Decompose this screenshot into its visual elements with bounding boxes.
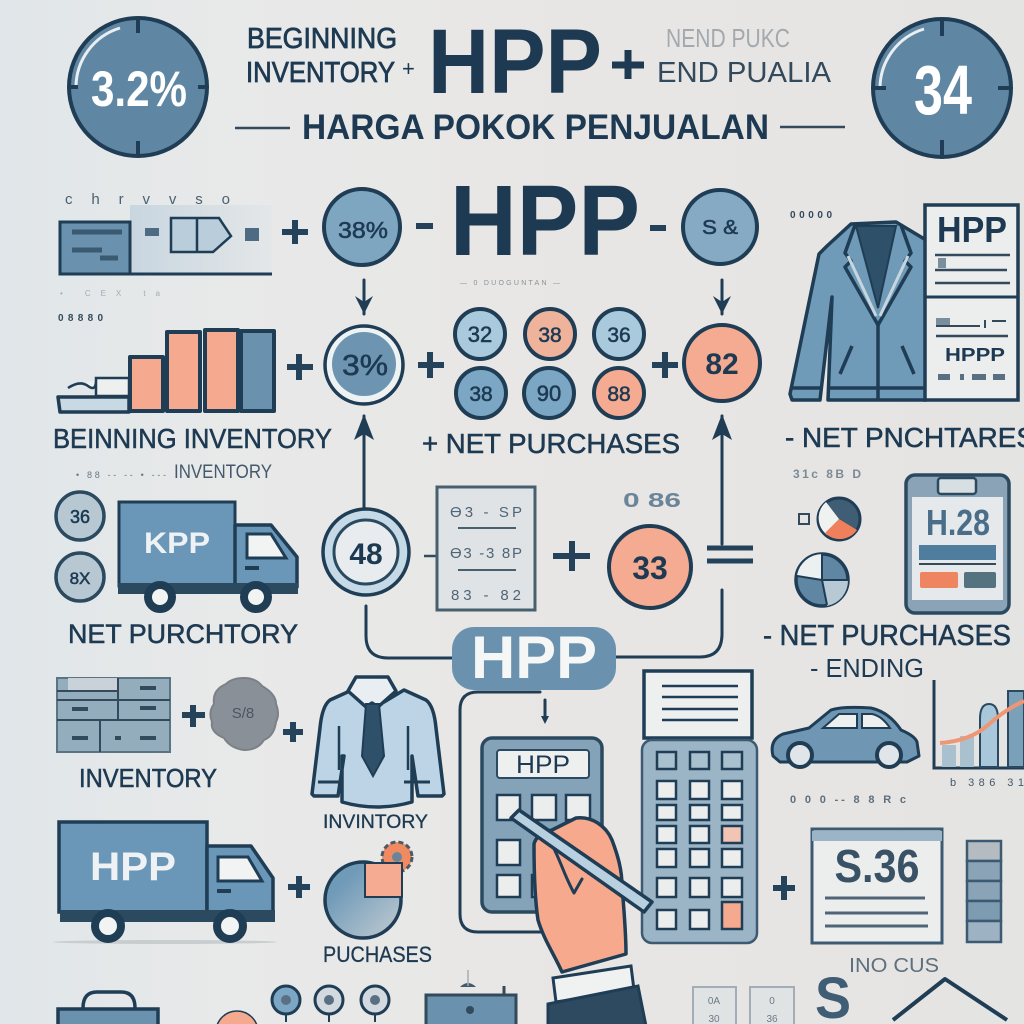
label: net purchases: + NET PURCHASES: [422, 428, 680, 459]
title block: END PUALIA: [657, 57, 832, 89]
frame around left calculator: [460, 692, 548, 932]
plus: [652, 352, 678, 378]
purchases circle icon: [325, 842, 412, 938]
badge cluster: net purchases: [455, 309, 644, 418]
calculator: left: [482, 738, 602, 912]
car icon: [772, 707, 919, 767]
badge: 3%: [325, 326, 403, 404]
bottom row: salmon circle: [216, 1011, 258, 1024]
equals: [707, 548, 753, 561]
gear blob icon: [210, 678, 278, 750]
label: inventory small: INVENTORY: [174, 462, 272, 483]
plus: [553, 541, 590, 571]
badge: S%: S &: [702, 217, 739, 239]
gauge: 34: [872, 18, 1012, 157]
badge: 33 with small caption: [609, 490, 691, 608]
gauge: 3.2%: 3.2%: [91, 61, 187, 117]
badge: 82: [684, 325, 760, 401]
table document: ϴ3 - SP: [450, 504, 522, 521]
label: invintory: INVINTORY: [323, 812, 428, 833]
badge: 3%: 3%: [342, 350, 388, 382]
badge: 48: 48: [349, 538, 383, 571]
price panel: [812, 829, 942, 943]
title block: [235, 11, 845, 147]
heading: HPP: HPP: [450, 165, 640, 277]
plus: [287, 354, 313, 380]
arrow down: [713, 280, 731, 314]
badge cluster: net purchases: 32: [468, 322, 492, 347]
truck: HPP 2: HPP: [90, 845, 176, 889]
bar chart: beginning inventory: [58, 313, 274, 412]
gauge: 3.2%: [68, 17, 208, 157]
gauge: 34: 34: [914, 51, 972, 129]
label: inventory: INVENTORY: [79, 763, 217, 793]
truck: HPP 2: [53, 822, 277, 944]
bar chart: beginning inventory: 0 8 8 8 0: [58, 313, 103, 324]
label: ino cus: INO CUS: [849, 955, 939, 977]
jacket icon: [790, 210, 926, 400]
table document: [424, 487, 535, 610]
plus: [773, 876, 795, 900]
caption: small text: — 0 DUOGUNTAN —: [460, 280, 560, 287]
line and bar chart: [934, 680, 1024, 789]
badges: 36 and 8X: 36: [70, 507, 90, 527]
tablet: H.28: [926, 502, 990, 543]
price panel: S.36: [834, 840, 920, 892]
title block: INVENTORY: [246, 57, 395, 89]
document: HPP sheet: HPPP: [945, 345, 1005, 365]
badge cluster: net purchases: 88: [607, 383, 631, 406]
badge cluster: net purchases: 36: [607, 324, 631, 347]
plus: [283, 722, 303, 742]
badge cluster: net purchases: 90: [537, 381, 561, 406]
shirt cuff and sleeve: [548, 966, 646, 1024]
calculator: right with receipt: [642, 671, 757, 943]
bottom row: briefcase: [58, 992, 158, 1024]
badge cluster: net purchases: 38: [538, 324, 562, 347]
drawers cabinet: [57, 678, 170, 752]
badge: 33 with small caption: 0 86: [623, 490, 681, 512]
badge: 48: [323, 509, 409, 595]
tiny arrow: [541, 700, 549, 724]
stacked column: [967, 841, 1001, 942]
row 1: inventory picture: [60, 191, 272, 298]
plus: [182, 705, 205, 727]
document: HPP sheet: HPP: [937, 209, 1007, 250]
label: beginning inventory: BEINNING INVENTORY: [53, 423, 332, 454]
table document: 83 - 82: [451, 587, 521, 604]
bottom row: triangle: [893, 979, 1007, 1020]
badge: 38%: 38%: [338, 217, 388, 243]
bottom row: small tables: 0A: [708, 996, 720, 1007]
truck: KPP: [118, 502, 298, 609]
connector: left to HPP pill: [366, 606, 454, 658]
badge: 33 with small caption: 33: [632, 550, 668, 586]
pie charts: [793, 467, 861, 606]
label: net purchases right: - NET PURCHASES: [763, 620, 1011, 652]
table document: ϴ3 -3 8P: [450, 545, 522, 562]
badge: 38%: [324, 189, 400, 265]
hand holding pen: [511, 810, 652, 972]
badge: 82: 82: [705, 348, 739, 381]
label: ending: - ENDING: [810, 653, 924, 683]
truck: KPP: KPP: [144, 527, 210, 560]
badges: 36 and 8X: [56, 492, 104, 601]
minus: [416, 223, 433, 229]
label: net purchtory: NET PURCHTORY: [68, 619, 298, 649]
jacket icon: 0 0 0 0 0: [790, 210, 832, 221]
pill: HPP: HPP: [471, 624, 597, 691]
row 1: inventory picture: c h r v v s o: [65, 191, 230, 208]
gear blob icon: S/8: [232, 705, 254, 722]
plus: [288, 876, 310, 898]
badge: S%: [683, 190, 757, 264]
bottom row: box with bell: [426, 970, 516, 1024]
bottom row: small tables: 0: [769, 996, 775, 1007]
badges: 36 and 8X: 8X: [70, 569, 90, 588]
label: inventory small: [76, 462, 272, 483]
title block: NEND PUKC: [666, 23, 790, 53]
label: puchases: PUCHASES: [323, 942, 432, 967]
document: HPP sheet: [925, 205, 1018, 400]
calculator: left: HPP: [516, 751, 570, 779]
title block: +: [402, 56, 415, 81]
bottom row: small circles: [272, 986, 389, 1022]
bottom row: small tables: [693, 987, 794, 1024]
connector: arrow up to 3%: [354, 414, 374, 507]
badge cluster: net purchases: 38: [469, 383, 493, 406]
line and bar chart: b 386 31: [950, 777, 1024, 789]
plus: [418, 352, 444, 378]
small caption: dots: 0 0 0 -- 8 8 R c: [790, 794, 906, 806]
label: inventory small: • 88 -- -- • ---: [76, 470, 166, 480]
shirt and tie icon: [312, 677, 444, 807]
row 1: inventory picture: • CEX ta: [60, 289, 161, 298]
connector: arrow up to 82: [616, 414, 732, 657]
pie charts: 31c 8B D: [793, 467, 861, 481]
arrow down: [355, 280, 373, 314]
minus: [650, 225, 666, 231]
plus: [282, 220, 308, 244]
title block: BEGINNING: [247, 23, 397, 55]
title block: HPP: [428, 11, 602, 113]
tablet: [906, 475, 1009, 613]
title block: HARGA POKOK PENJUALAN: [302, 108, 769, 147]
